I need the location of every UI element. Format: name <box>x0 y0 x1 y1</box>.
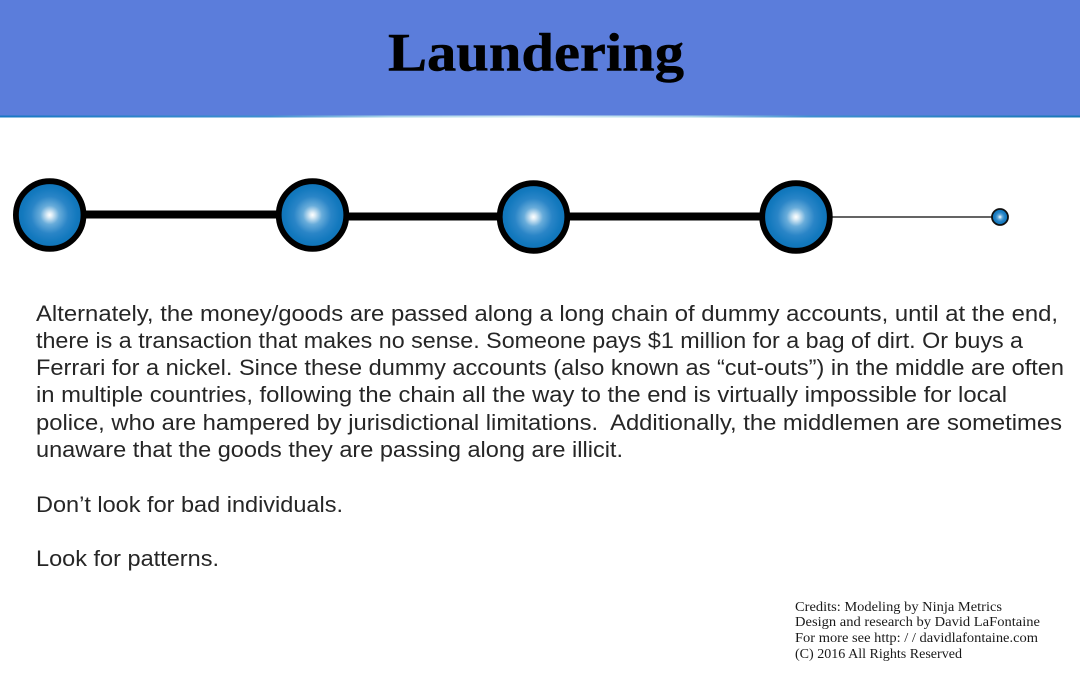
title: Laundering <box>388 22 684 82</box>
credits: (C) 2016 All Rights Reserved <box>795 646 962 661</box>
body text: police, who are hampered by jurisdictional limitations. Additionally, the middlemen are sometimes <box>36 410 1062 435</box>
body text: Look for patterns. <box>36 546 219 571</box>
thick connector 1 <box>80 210 284 218</box>
body text: there is a transaction that makes no sense. Someone pays $1 million for a bag of dirt. Or buys a <box>36 328 1024 353</box>
node 2 <box>279 181 346 249</box>
body text: unaware that the goods they are passing along are illicit. <box>36 437 623 462</box>
body text: in multiple countries, following the chain all the way to the end is virtually impossible for local <box>36 382 1007 407</box>
body text <box>36 301 1064 571</box>
thick connector 3 <box>565 212 765 220</box>
node 3 <box>500 183 567 251</box>
node 1 <box>16 181 84 249</box>
body text: Alternately, the money/goods are passed along a long chain of dummy accounts, until at the end, <box>36 301 1058 326</box>
credits: Credits: Modeling by Ninja Metrics <box>795 599 1002 614</box>
credits <box>795 599 1040 661</box>
credits: Design and research by David LaFontaine <box>795 614 1040 629</box>
body text: Don’t look for bad individuals. <box>36 492 343 517</box>
header banner <box>0 0 1080 118</box>
thin connector <box>830 216 995 218</box>
thick connector 2 <box>345 212 501 220</box>
body text: Ferrari for a nickel. Since these dummy accounts (also known as “cut-outs”) in the middle are often <box>36 355 1064 380</box>
node 4 <box>762 183 830 251</box>
chain diagram <box>16 181 1008 251</box>
credits: For more see http: / / davidlafontaine.com <box>795 630 1039 645</box>
small end node <box>992 209 1008 225</box>
